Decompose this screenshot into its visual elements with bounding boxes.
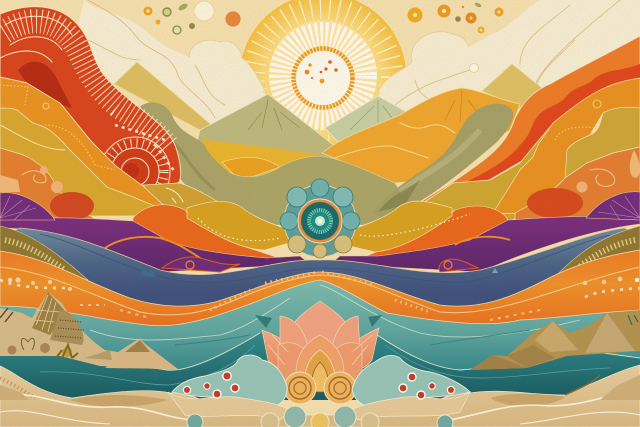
sun	[239, 0, 407, 161]
purple fan left	[0, 193, 55, 220]
large cloud right	[376, 0, 640, 130]
gold field beside mandala left	[187, 202, 300, 250]
gold band right	[405, 120, 570, 225]
pyramid right	[482, 64, 543, 108]
lotus flower	[255, 301, 382, 404]
orange river	[0, 250, 640, 326]
green mountain left	[195, 94, 345, 160]
small discs bottom centre	[187, 406, 453, 427]
gold bumps right	[565, 107, 640, 178]
sky dots left	[144, 1, 241, 34]
orange band right	[493, 78, 640, 215]
mandala	[280, 179, 360, 258]
purple band left	[0, 218, 310, 272]
swirl ornament left	[166, 188, 183, 203]
olive dotted hill left	[0, 226, 88, 280]
pale mountain right	[325, 96, 412, 142]
sky dots right	[408, 2, 504, 33]
centre golden hills left	[200, 130, 322, 185]
red patterned hill left	[0, 7, 181, 207]
large cloud left	[78, 0, 268, 130]
sand hills left	[0, 292, 178, 370]
olive dotted hill right	[552, 226, 640, 280]
olive ridge under mandala	[210, 156, 420, 225]
blue river	[0, 228, 640, 310]
olive ridge left	[138, 102, 262, 225]
small cloud right	[378, 32, 469, 110]
purple band right	[330, 216, 640, 272]
orange paisley right	[515, 147, 640, 225]
small cloud left	[189, 40, 266, 92]
pale cloud left	[168, 355, 290, 420]
olive ridge right	[373, 104, 513, 225]
purple fan right	[586, 192, 640, 220]
dark teal river	[0, 333, 640, 400]
pale cloud right	[350, 355, 470, 420]
orange patch centre right	[355, 206, 510, 260]
orange band left	[0, 77, 175, 216]
orange patch centre left	[133, 205, 285, 260]
sand dunes bottom	[0, 365, 640, 427]
gold bumps left	[0, 108, 175, 216]
gold tail left	[143, 183, 250, 228]
red-orange band right	[415, 36, 640, 210]
brown mountains right	[470, 310, 640, 370]
pyramid left	[114, 62, 215, 130]
teal river	[0, 276, 640, 375]
orange paisley left	[0, 148, 112, 228]
gold field beside mandala right	[345, 201, 470, 252]
orange hill right	[322, 88, 520, 183]
